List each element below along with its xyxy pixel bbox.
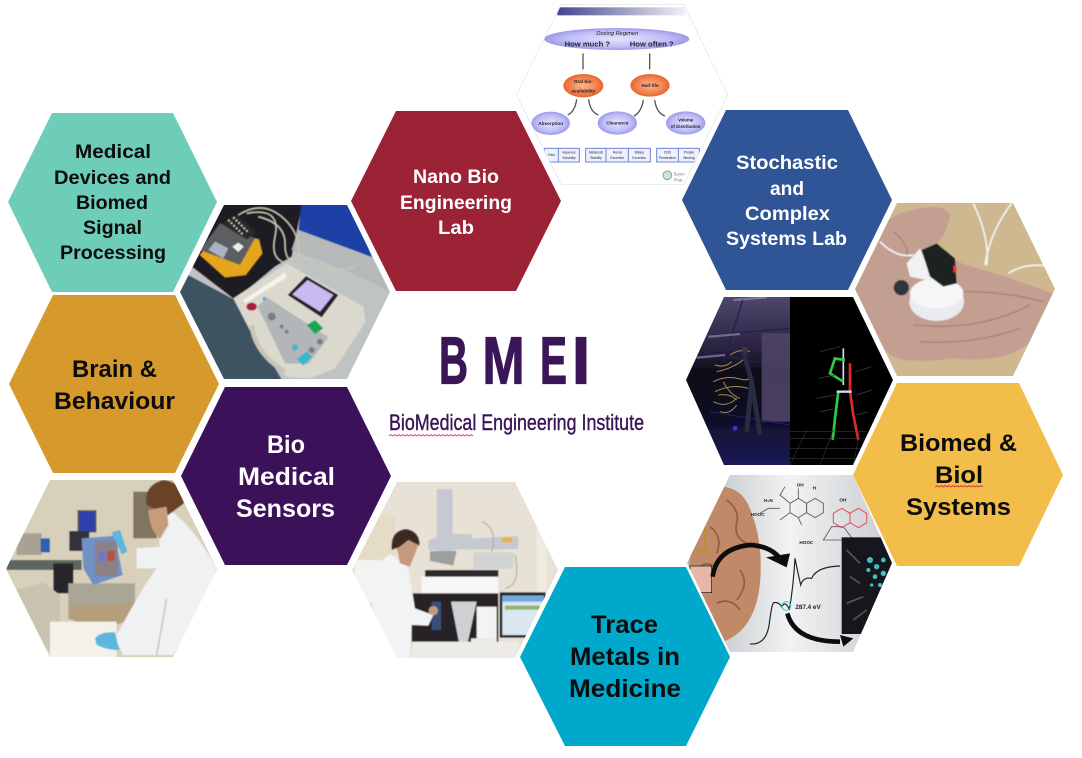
photo hexagon: dosing regimen diagram: Renal xyxy=(613,151,622,155)
hexagon: Biomed and Biol Systems: Biomed & xyxy=(900,430,1017,457)
hexagon: Trace Metals in Medicine: Medicine xyxy=(569,675,681,703)
hexagon: Bio Medical Sensors: Sensors xyxy=(236,495,335,523)
hexagon: Stochastic and Complex Systems Lab: and xyxy=(770,179,804,200)
hexagon: Medical Devices and Biomed Signal Processing xyxy=(8,113,217,292)
photo hexagon: dosing regimen diagram: Metabolic xyxy=(589,151,603,155)
hexagon: Medical Devices and Biomed Signal Processing: Biomed xyxy=(76,193,148,214)
photo hexagon: motion capture xyxy=(680,295,897,468)
photo hexagon: dosing regimen diagram: Biliary xyxy=(635,151,644,155)
hexagon: Stochastic and Complex Systems Lab xyxy=(682,110,892,290)
hexagon: Trace Metals in Medicine xyxy=(520,567,730,746)
subtitle: BioMedical Engineering Institute: BioMedical Engineering Institute xyxy=(389,410,644,435)
title: BMEI logotype xyxy=(439,324,590,398)
title: BMEI logotype: I xyxy=(572,324,590,398)
hexagon: Stochastic and Complex Systems Lab: Complex xyxy=(745,204,830,225)
photo hexagon: brain scan and spectrum: HOOC xyxy=(751,512,765,517)
photo hexagon: dosing regimen diagram: Volume xyxy=(678,117,694,122)
hexagon: Trace Metals in Medicine: Trace xyxy=(591,611,658,639)
photo hexagon: dosing regimen diagram: Binding xyxy=(683,156,695,160)
photo hexagon: ECG machine xyxy=(180,205,390,379)
hexagon: Nano Bio Engineering Lab: Engineering xyxy=(400,193,512,214)
photo hexagon: dosing regimen diagram: Stability xyxy=(590,156,602,160)
photo hexagon: dosing regimen diagram: How often ? xyxy=(630,39,674,48)
hexagon: Trace Metals in Medicine: Metals in xyxy=(570,643,680,671)
hexagon: Nano Bio Engineering Lab: Lab xyxy=(438,218,474,239)
photo hexagon: dosing regimen diagram: Aqueous xyxy=(562,151,576,155)
photo hexagon: dosing regimen diagram: Solubility xyxy=(562,156,576,160)
hexagon: Bio Medical Sensors: Bio xyxy=(267,431,305,459)
photo hexagon: dosing regimen diagram: Absorption xyxy=(538,121,563,126)
photo hexagon: dosing regimen diagram: Dosing Regimen xyxy=(596,31,638,37)
photo hexagon: brain scan and spectrum: H₂N xyxy=(764,498,773,503)
photo hexagon: dosing regimen diagram: Clearance xyxy=(606,121,629,126)
photo hexagon: researcher with laboratory instrument xyxy=(6,480,217,657)
photo hexagon: dosing regimen diagram: Rice xyxy=(548,153,555,157)
hexagon: Stochastic and Complex Systems Lab: Stochastic xyxy=(736,153,838,174)
hexagon: Medical Devices and Biomed Signal Processing: Processing xyxy=(60,243,166,264)
photo hexagon: dosing regimen diagram: Excretion xyxy=(632,156,646,160)
hexagon: Brain and Behaviour: Behaviour xyxy=(54,388,175,415)
photo hexagon: dosing regimen diagram xyxy=(516,4,728,185)
photo hexagon: dosing regimen diagram: Bayer xyxy=(674,172,686,177)
title: BMEI logotype: E xyxy=(540,324,567,398)
photo hexagon: dosing regimen diagram: Excretion xyxy=(610,156,624,160)
title: BMEI logotype: M xyxy=(482,324,524,398)
photo hexagon: dosing regimen diagram: Phar xyxy=(674,178,683,183)
hexagon: Biomed and Biol Systems xyxy=(853,383,1063,566)
hexagon: Biomed and Biol Systems: Biol xyxy=(935,462,983,489)
hexagon: Bio Medical Sensors: Medical xyxy=(238,463,335,491)
photo hexagon: dosing regimen diagram: CNS xyxy=(664,151,672,155)
hexagon: Nano Bio Engineering Lab xyxy=(351,111,561,291)
hexagon: Medical Devices and Biomed Signal Processing: Signal xyxy=(83,218,142,239)
hexagon: Stochastic and Complex Systems Lab: Systems Lab xyxy=(726,229,847,250)
photo hexagon: brain scan and spectrum: 287.4 eV xyxy=(795,604,821,611)
hexagon: Medical Devices and Biomed Signal Processing: Medical xyxy=(75,142,151,163)
title: BMEI logotype: B xyxy=(439,324,468,398)
photo hexagon: dosing regimen diagram: availability xyxy=(571,88,596,93)
hexagon: Bio Medical Sensors xyxy=(181,387,391,565)
photo hexagon: brain scan and spectrum: H xyxy=(813,485,817,490)
hexagon: Medical Devices and Biomed Signal Processing: Devices and xyxy=(54,168,171,189)
hexagon: Brain and Behaviour xyxy=(9,295,219,473)
photo hexagon: brain scan and spectrum: HOOC xyxy=(799,540,814,545)
hexagon: Brain and Behaviour: Brain & xyxy=(72,356,157,383)
photo hexagon: brain scan and spectrum: OH xyxy=(839,498,847,503)
photo hexagon: brain scan and spectrum xyxy=(680,473,900,655)
photo hexagon: dosing regimen diagram: Oral bio- xyxy=(574,79,593,84)
hexagon: Biomed and Biol Systems: Systems xyxy=(906,494,1011,521)
hexagon: Nano Bio Engineering Lab: Nano Bio xyxy=(413,167,499,188)
photo hexagon: dosing regimen diagram: Penetration xyxy=(659,156,676,160)
photo hexagon: researcher at analyser xyxy=(352,482,558,658)
photo hexagon: dosing regimen diagram: Protein xyxy=(684,151,694,155)
photo hexagon: brain scan and spectrum: OH xyxy=(797,483,804,488)
photo hexagon: dosing regimen diagram: of Distribution xyxy=(671,124,701,129)
photo hexagon: dosing regimen diagram: How much ? xyxy=(565,39,610,48)
photo hexagon: dosing regimen diagram: Half-life xyxy=(641,83,659,88)
photo hexagon: wearable sensor in hand xyxy=(855,203,1055,376)
